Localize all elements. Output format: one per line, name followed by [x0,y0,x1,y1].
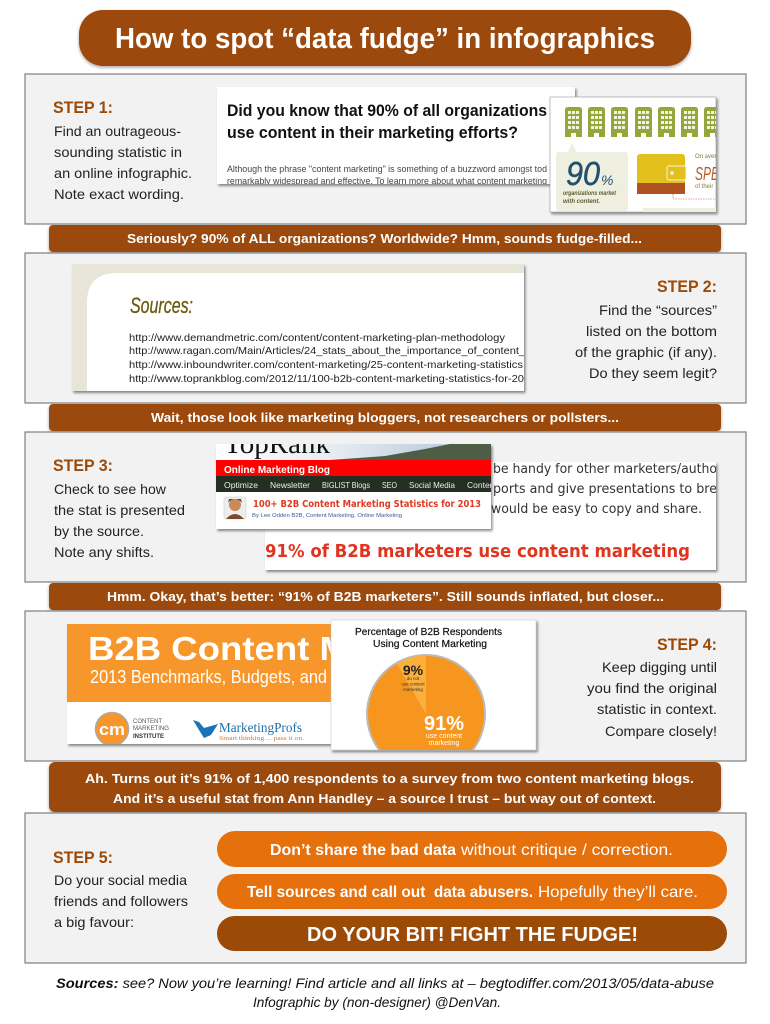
bar: reaction 3 [49,583,721,610]
callout: 90% organizations: organizations market [563,191,617,197]
pill: tell sources [217,874,727,909]
chart: pie of B2B respondents: marketing [429,740,459,747]
step 1 text: sounding statistic in [54,144,182,160]
screenshot: sources list: http://www.ragan.com/Main/Articles/24_stats_about_the_importance_of_content_ [129,345,525,357]
screenshot: marketing stat page: ports and give presentations to bre [493,482,717,497]
footer: sources and credit [56,975,714,1010]
panel: step 4 [25,611,746,773]
pill: don't share [217,831,727,867]
callout: 90% organizations: % [601,172,613,188]
step 4 text: you find the original [587,680,717,696]
panel: step 2 [25,253,746,403]
screenshot: article headline: Although the phrase "content marketing" is something of a buzzword amongst tod [227,164,547,174]
step 2 text: of the graphic (if any). [575,344,717,360]
step 5 text: friends and followers [54,893,188,909]
step 5 text [53,848,188,930]
chart: pie of B2B respondents: 9% [403,662,424,678]
screenshot: sources list: http://www.demandmetric.com/content/content-marketing-plan-methodology [129,332,506,344]
step 1 text: Note exact wording. [54,186,184,202]
title: How to spot “data fudge” in infographics [115,23,655,55]
screenshot: TopRank blog header: Online Marketing Blog [224,465,330,476]
step 3 text: the stat is presented [54,502,185,518]
logo: Content Marketing Institute [96,712,169,746]
screenshot: sources list: Sources: [130,293,193,318]
screenshot: article headline: remarkably widespread and effective. To learn more about what content marketing [227,176,547,186]
step 3 text [53,456,185,560]
bar: reaction 2: Wait, those look like marketing bloggers, not researchers or pollsters... [151,410,619,425]
step 3 text: STEP 3: [53,456,113,475]
step 2 text: Do they seem legit? [589,365,717,381]
step 1 text: STEP 1: [53,98,113,117]
panel: step 5 [25,813,746,963]
chart: pie of B2B respondents: 91% [424,713,464,735]
callout: 90% organizations: with content. [563,199,600,205]
chart: pie of B2B respondents: do not [407,676,420,681]
screenshot: B2B report cover: B2B Content M [88,630,350,667]
pill: don't share: without critique / correction. [460,842,673,859]
pill: tell sources: Hopefully they’ll care. [538,884,698,901]
bar: reaction 4 [49,762,721,812]
screenshot: TopRank blog header: Social Media [409,480,455,490]
chart: pie of B2B respondents: use content [426,733,462,740]
icon: author photo [224,497,246,519]
screenshot: TopRank blog header: SEO [382,480,397,490]
screenshot: 90% infographic crop: SPE [695,164,720,184]
screenshot: TopRank blog header: Newsletter [270,480,310,490]
logo: MarketingProfs [193,720,304,742]
step 5 text: STEP 5: [53,848,113,867]
logo: Content Marketing Institute: CONTENT [133,718,162,725]
step 2 text: STEP 2: [657,277,717,296]
screenshot: sources list [72,264,525,391]
bar: reaction 1 [49,225,721,252]
screenshot: sources list: http://www.toprankblog.com/2012/11/100-b2b-content-marketing-statistics-for-20 [129,373,524,385]
chart: pie of B2B respondents: Using Content Marketing [373,638,487,650]
screenshot: B2B report cover [67,624,350,746]
screenshot: TopRank blog header: Optimize [224,480,258,490]
logo: Content Marketing Institute: cm [99,720,125,739]
chart: pie of B2B respondents: use content [401,682,425,686]
bar: reaction 2 [49,404,721,431]
step 2 text [575,277,717,381]
bar: reaction 4: Ah. Turns out it’s 91% of 1,400 respondents to a survey from two content marketing blogs. [85,771,694,786]
step 2 text: listed on the bottom [586,323,717,339]
step 5 text: a big favour: [54,914,134,930]
step 1 text: Find an outrageous- [54,123,181,139]
logo: MarketingProfs: Smart thinking ... pass it on. [219,735,304,742]
callout: 90% organizations: 90 [566,155,601,192]
step 1 text: an online infographic. [54,165,192,181]
step 3 text: Note any shifts. [54,544,154,560]
icon: wallet [637,154,686,194]
step 3 text: Check to see how [54,481,167,497]
screenshot: B2B report cover: 2013 Benchmarks, Budgets, and [90,667,327,687]
screenshot: marketing stat page: be handy for other marketers/autho [493,462,717,477]
pill: don't share: Don’t share the bad data [270,842,456,859]
screenshot: 90% infographic crop [550,97,721,212]
screenshot: 90% infographic crop: On aver [695,154,716,160]
step 3 text: by the source. [54,523,144,539]
panel: step 3 [25,429,746,582]
logo: Content Marketing Institute: MARKETING [133,725,169,732]
step 4 text: statistic in context. [597,701,717,717]
footer: sources and credit: Sources: see? Now you’re learning! Find article and all links at – begtodiffer.com/2013/05/data-abuse [56,975,714,991]
screenshot: TopRank blog header: Content [467,480,497,490]
screenshot: TopRank blog header: BIGLIST Blogs [322,480,370,490]
chart: pie of B2B respondents: Percentage of B2B Respondents [355,626,502,638]
bar: reaction 1: Seriously? 90% of ALL organizations? Worldwide? Hmm, sounds fudge-filled... [127,231,642,246]
step 4 text: Keep digging until [602,659,717,675]
bar: reaction 3: Hmm. Okay, that’s better: “91% of B2B marketers”. Still sounds inflated, but closer... [107,589,664,604]
screenshot: TopRank blog header [216,444,494,533]
step 4 text: STEP 4: [657,635,717,654]
step 4 text: Compare closely! [605,723,717,739]
step 4 text [587,635,717,739]
chart: pie of B2B respondents [330,620,540,754]
pill: call to action: DO YOUR BIT! FIGHT THE FUDGE! [307,924,638,946]
screenshot: 90% infographic crop: of their [695,184,713,190]
screenshot: TopRank blog header: TopRank [224,429,331,459]
screenshot: marketing stat page: would be easy to copy and share. [491,502,702,517]
screenshot: TopRank blog header: By Lee Odden B2B, Content Marketing, Online Marketing [252,513,402,519]
screenshot: sources list: http://www.inboundwriter.com/content-marketing/25-content-marketing-statistics [129,359,523,371]
screenshot: marketing stat page: 91% of B2B marketers use content marketing [265,541,690,562]
screenshot: article headline [217,87,575,186]
screenshot: marketing stat page [265,462,717,570]
footer: sources and credit: Infographic by (non-designer) @DenVan. [253,994,501,1010]
logo: Content Marketing Institute: INSTITUTE [133,733,165,740]
step 2 text: Find the “sources” [599,302,717,318]
pill: call to action [217,916,727,951]
bar: reaction 4: And it’s a useful stat from Ann Handley – a source I trust – but way out of context. [113,791,656,806]
logo: MarketingProfs: MarketingProfs [219,721,302,736]
step 1 text [53,98,192,202]
panel: step 1 [25,74,746,224]
icon row: buildings [565,107,721,137]
step 5 text: Do your social media [54,872,187,888]
chart: pie of B2B respondents: marketing [403,687,423,692]
title [79,10,691,66]
screenshot: article headline: Did you know that 90% of all organizations [227,102,547,120]
screenshot: TopRank blog header: 100+ B2B Content Marketing Statistics for 2013 [253,499,481,510]
screenshot: article headline: use content in their marketing efforts? [227,124,518,142]
callout: 90% organizations [556,143,628,211]
pill: tell sources: Tell sources and call out data abusers. [247,884,533,901]
